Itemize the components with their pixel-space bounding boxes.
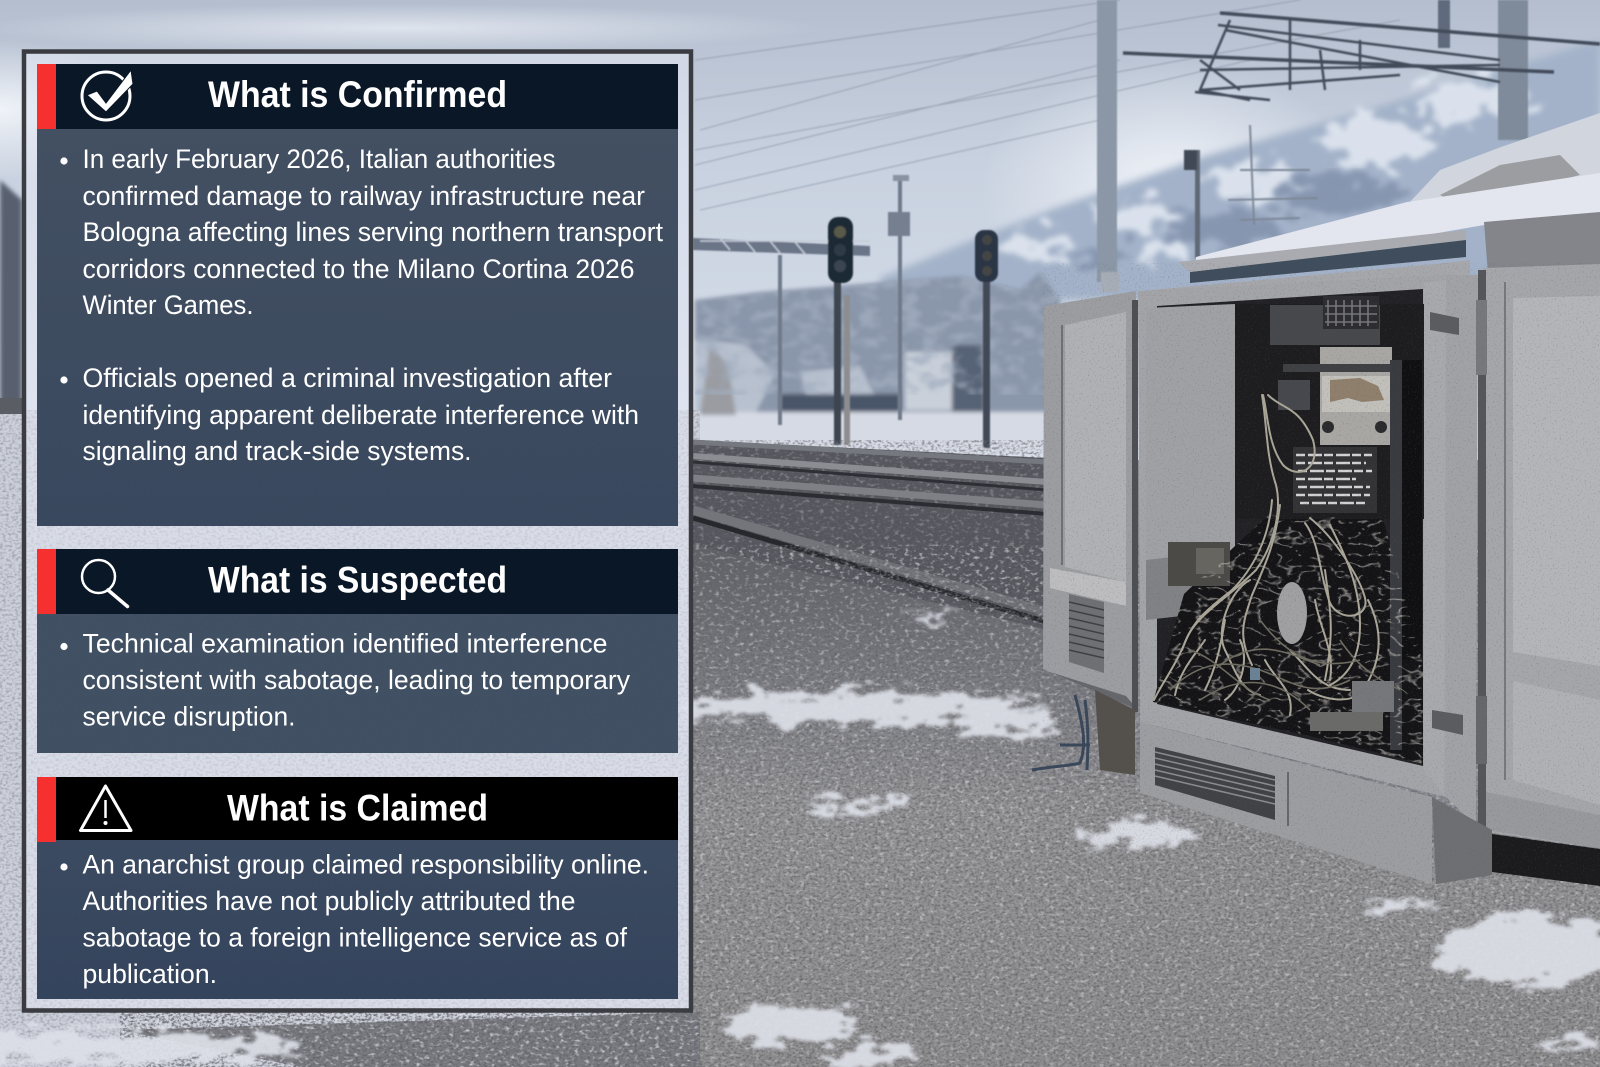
track bed <box>693 440 1047 630</box>
header bar <box>56 777 678 840</box>
icon: check mark in circle <box>82 70 133 120</box>
bullet list: Technical examination identified interference <box>82 628 608 658</box>
icon: warning triangle <box>80 786 131 830</box>
small relay <box>1278 380 1310 410</box>
distant treeline and town <box>695 272 1060 452</box>
white blob <box>1277 582 1307 644</box>
panel: what is claimed <box>37 777 678 999</box>
panel body <box>37 839 678 999</box>
bullet list: An anarchist group claimed responsibility online. <box>82 850 649 880</box>
pipe <box>1283 364 1421 372</box>
bullet list: identifying apparent deliberate interference with <box>82 400 639 430</box>
right cabinet <box>1484 264 1600 848</box>
bullet list <box>60 144 663 466</box>
lower panel with vent <box>1140 722 1432 884</box>
bullet list <box>60 628 630 732</box>
mountain <box>880 40 1600 300</box>
white plate <box>1320 347 1392 445</box>
panel body <box>37 128 678 526</box>
panel: what is suspected <box>37 549 678 753</box>
header bar <box>56 549 678 614</box>
bullet list: signaling and track-side systems. <box>82 436 472 466</box>
dark roof strip <box>1190 238 1466 283</box>
heading: What is Suspected <box>208 560 507 600</box>
gantry, poles and signals <box>693 0 1528 448</box>
opening back wall <box>1157 289 1423 766</box>
left door <box>1043 291 1138 710</box>
overhead wires <box>695 0 1400 210</box>
wires <box>1154 395 1379 715</box>
grille <box>1323 296 1379 329</box>
left dark hillside <box>0 180 22 410</box>
right upper cabinet <box>1484 212 1600 274</box>
main frame <box>1138 275 1446 797</box>
cabinet legs and cables <box>1095 690 1135 775</box>
bullet list: sabotage to a foreign intelligence service as of <box>82 922 627 952</box>
header bar <box>56 64 678 129</box>
red accent <box>37 549 56 614</box>
sky <box>0 0 1600 460</box>
bullet list: Winter Games. <box>82 290 254 320</box>
left box <box>1168 542 1230 586</box>
left snow bank <box>0 410 700 1067</box>
bullet list: service disruption. <box>82 702 296 732</box>
forest texture <box>695 270 1060 395</box>
cabinet: main group <box>1032 113 1600 886</box>
bullet list: consistent with sabotage, leading to temporary <box>82 665 630 695</box>
heading: What is Claimed <box>227 788 488 828</box>
bullet list <box>60 850 649 989</box>
heading: What is Confirmed <box>208 74 507 115</box>
cabinet roof snow <box>1407 113 1600 215</box>
cabinet grime <box>1043 263 1600 884</box>
bullet list: Bologna affecting lines serving northern transport <box>82 217 663 247</box>
bullet list: corridors connected to the Milano Cortina 2026 <box>82 254 634 284</box>
label plate <box>1293 447 1377 513</box>
snow patches <box>0 612 1600 1067</box>
shadow beneath right cabinet <box>1492 834 1600 886</box>
bullet list: In early February 2026, Italian authorities <box>82 144 556 174</box>
lower right components <box>1352 681 1394 712</box>
gravel ground <box>693 545 1600 1067</box>
overhead catenary <box>1123 13 1600 100</box>
rails <box>693 442 1047 622</box>
bullet list: Officials opened a criminal investigation after <box>82 363 612 393</box>
icon: magnifying glass <box>82 560 128 606</box>
dark wiring mass <box>1153 515 1423 764</box>
bullet list: publication. <box>82 959 217 989</box>
red accent <box>37 777 56 842</box>
red accent <box>37 64 56 129</box>
bullet list: Authorities have not publicly attributed the <box>82 886 576 916</box>
wire tangle texture <box>1150 510 1430 770</box>
panel frame <box>24 52 691 1010</box>
panel body <box>37 613 678 753</box>
hinge column <box>1424 280 1446 795</box>
panel: what is confirmed <box>37 64 678 526</box>
bullet list: confirmed damage to railway infrastructure near <box>82 181 645 211</box>
